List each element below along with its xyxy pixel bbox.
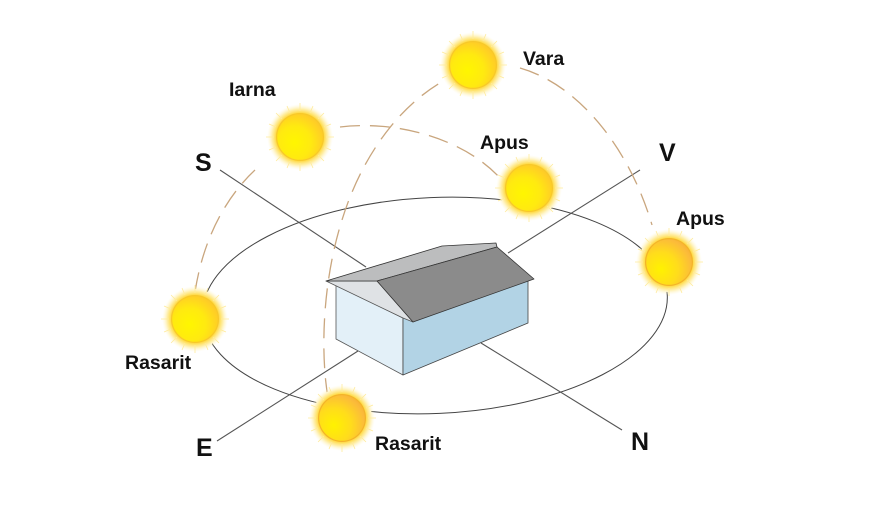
direction: V: V: [659, 139, 676, 167]
sun: Iarna: [266, 103, 334, 171]
label: Vara: Vara: [523, 48, 564, 70]
right wall: [403, 279, 528, 375]
label: Apus winter: Apus: [480, 132, 529, 154]
direction: S: S: [195, 149, 212, 177]
back roof slope: [326, 243, 497, 281]
gable roof end: [326, 281, 413, 322]
summer sun path: [324, 68, 652, 398]
sun: Rasarit winter: [161, 285, 229, 353]
sun: Vara: [439, 31, 507, 99]
left wall: [336, 285, 403, 375]
sun: Rasarit summer: [308, 384, 376, 452]
sun: Apus summer: [635, 228, 703, 296]
sun: Apus winter: [495, 154, 563, 222]
compass axis lines: [217, 170, 640, 441]
label: Apus summer: Apus: [676, 208, 725, 230]
label: Iarna: Iarna: [229, 79, 276, 101]
label: Rasarit summer: Rasarit: [375, 433, 442, 455]
direction: N: N: [631, 428, 649, 456]
direction: E: E: [196, 434, 213, 462]
front roof slope: [377, 247, 534, 322]
sun path ellipse: [198, 187, 672, 424]
label: Rasarit winter: Rasarit: [125, 352, 192, 374]
winter sun path: [195, 126, 500, 292]
house: [326, 243, 534, 375]
